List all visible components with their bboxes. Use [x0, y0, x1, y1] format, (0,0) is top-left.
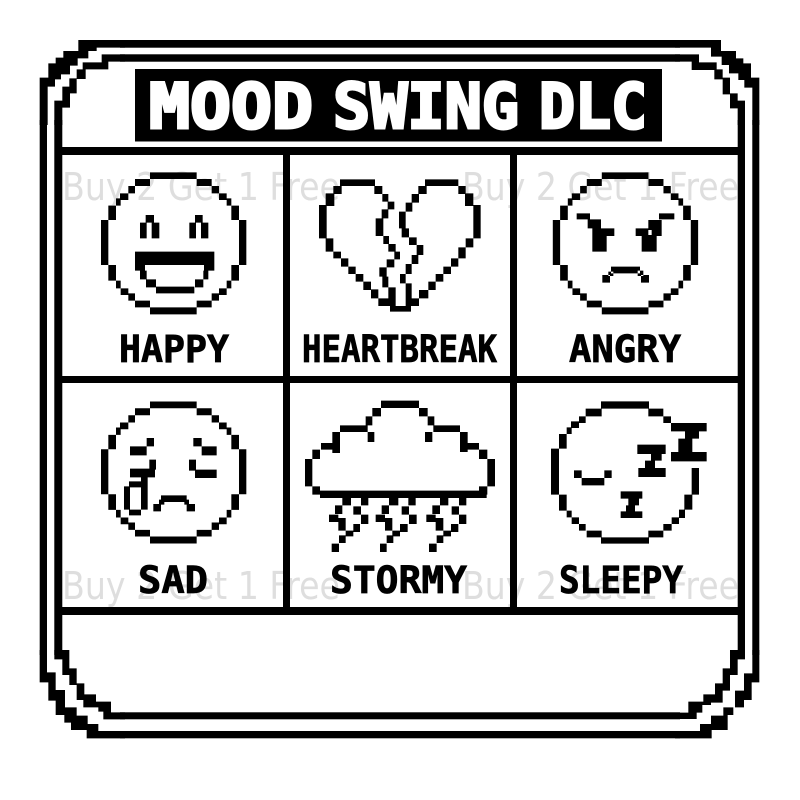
cell: stormy: [305, 401, 495, 602]
icon: angry face: [553, 172, 698, 314]
title banner: SWING: [333, 70, 519, 143]
icon: storm cloud: [305, 401, 495, 552]
icon: sleeping face with Z marks: [551, 401, 707, 544]
cell: heartbreak: HEARTBREAK: [302, 328, 498, 371]
cell: happy: [101, 172, 246, 371]
cell: stormy: STORMY: [330, 559, 468, 602]
title banner: MOOD: [149, 70, 313, 143]
cell: heartbreak: [302, 179, 498, 371]
grid lines: six mood cells: [55, 147, 745, 615]
cell: angry: ANGRY: [569, 328, 682, 371]
watermark: repeated promo text: [62, 165, 739, 609]
title banner: [135, 69, 662, 143]
cell: sad: SAD: [138, 559, 208, 602]
watermark: repeated promo text: Buy 2 Get 1 Free: [62, 165, 340, 210]
cell: sleepy: [551, 401, 707, 602]
icon: happy face: [101, 172, 246, 314]
icon: broken heart: [319, 179, 481, 312]
card frame: double stepped border: [40, 40, 759, 738]
watermark: repeated promo text: Buy 2 Get 1 Free: [62, 564, 340, 609]
cell: sleepy: SLEEPY: [559, 559, 684, 602]
watermark: repeated promo text: Buy 2 Get 1 Free: [462, 564, 739, 609]
icon: crying face: [101, 402, 246, 544]
watermark: repeated promo text: Buy 2 Get 1 Free: [462, 165, 739, 210]
icon: lightning bolts: [329, 498, 466, 552]
title banner: DLC: [539, 70, 647, 143]
cell: happy: HAPPY: [119, 328, 230, 371]
cell: sad: [101, 402, 246, 602]
cell: angry: [553, 172, 698, 371]
